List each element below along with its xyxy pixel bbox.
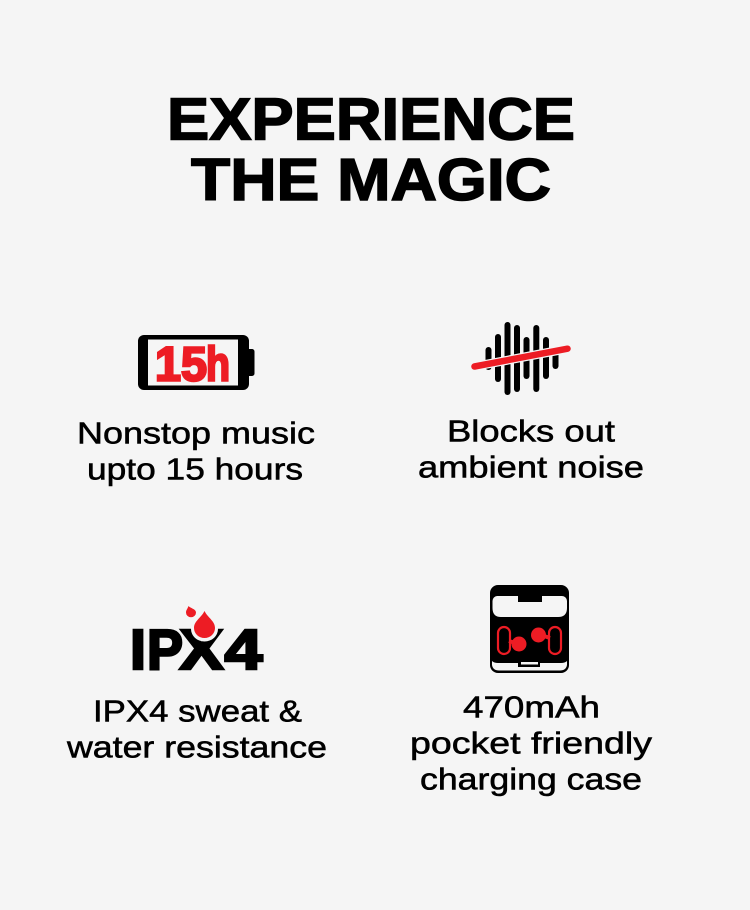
- feature: water resistance: [66, 606, 327, 764]
- text: water resistance caption: [66, 694, 327, 764]
- text: noise caption: [418, 414, 644, 484]
- text: battery caption: upto 15 hours: [87, 452, 303, 486]
- icon: battery 15h: 15: [155, 339, 207, 392]
- title: [167, 86, 575, 213]
- title: THE MAGIC: [191, 147, 551, 213]
- text: battery caption: Nonstop music: [77, 416, 315, 450]
- text: charging case caption: [410, 690, 653, 796]
- icon: IPX4 with drops: P: [147, 618, 183, 682]
- text: noise caption: Blocks out: [447, 414, 615, 448]
- icon: charging case with earbuds: [490, 585, 569, 673]
- right earbud: [531, 627, 561, 654]
- text: charging case caption: 470mAh: [463, 690, 600, 724]
- icon: IPX4 with drops: [130, 606, 263, 682]
- text: charging case caption: charging case: [420, 762, 642, 796]
- icon: battery 15h: [138, 335, 254, 392]
- icon: IPX4 with drops: 4: [224, 618, 263, 682]
- text: charging case caption: pocket friendly: [410, 726, 653, 760]
- feature: noise cancellation: [418, 325, 644, 484]
- icon: IPX4 with drops: X: [180, 618, 224, 682]
- icon: IPX4 with drops: I: [130, 618, 146, 682]
- text: noise caption: ambient noise: [418, 450, 644, 484]
- left earbud: [498, 627, 526, 654]
- text: water resistance caption: water resistance: [66, 730, 327, 764]
- feature: battery life: [77, 335, 315, 486]
- text: water resistance caption: IPX4 sweat &: [93, 694, 302, 728]
- text: battery caption: [77, 416, 315, 486]
- feature: charging case: [410, 585, 653, 796]
- title: EXPERIENCE: [167, 86, 575, 152]
- icon: crossed-out sound wave: [474, 325, 568, 392]
- icon: battery 15h: h: [206, 339, 230, 392]
